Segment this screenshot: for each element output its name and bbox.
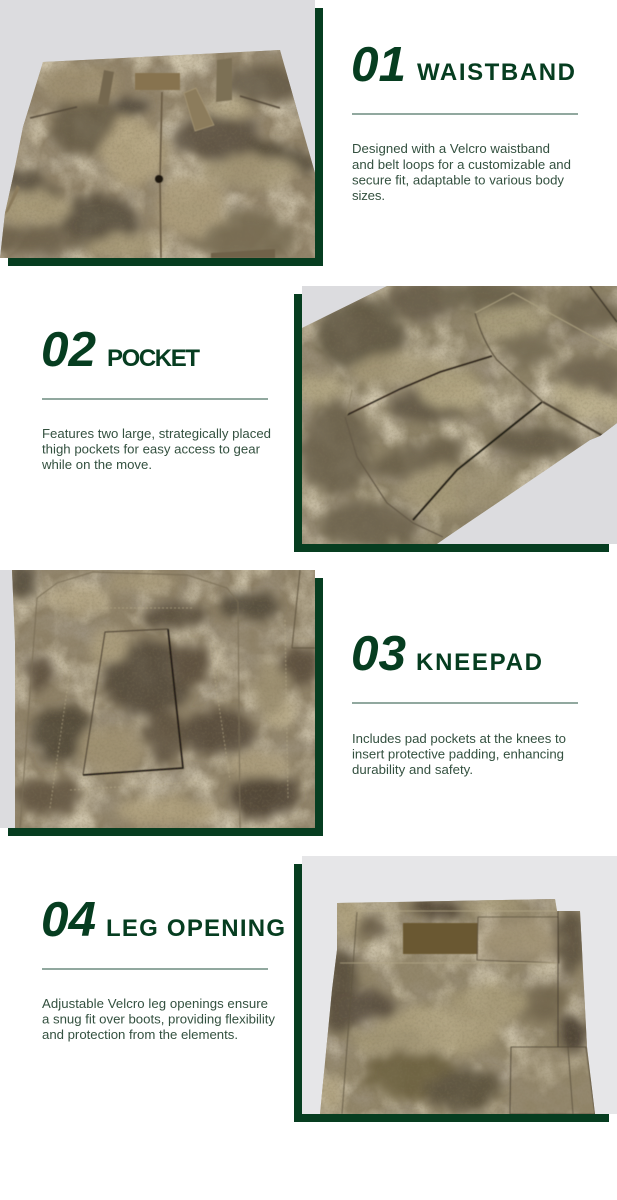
description: waistband: sizes. xyxy=(352,188,385,203)
description: kneepad: Includes pad pockets at the knees to xyxy=(352,731,566,746)
leg opening details xyxy=(340,911,595,1114)
description: kneepad xyxy=(352,731,566,777)
description: leg opening xyxy=(42,996,275,1042)
description: leg opening: and protection from the elements. xyxy=(42,1027,238,1042)
knee pad seams and opening xyxy=(20,570,315,828)
green corner frame xyxy=(294,864,609,1122)
description: waistband: secure fit, adaptable to various body xyxy=(352,172,564,188)
number 01: 01 xyxy=(351,37,406,92)
panel: leg opening xyxy=(41,856,617,1122)
panel: waistband xyxy=(0,0,578,266)
pocket seams and slits xyxy=(345,286,617,537)
heading: kneepad: KNEEPAD xyxy=(416,649,542,676)
description: leg opening: a snug fit over boots, providing flexibility xyxy=(42,1012,275,1026)
green corner frame xyxy=(8,8,323,266)
waistband details xyxy=(5,58,280,258)
panel: pocket xyxy=(41,278,617,552)
photo: waistband of camouflage trousers xyxy=(0,0,322,259)
description: waistband xyxy=(352,141,571,203)
number 04: 04 xyxy=(41,892,96,947)
photo: knee pad pocket of camouflage trousers xyxy=(0,564,318,828)
green corner frame xyxy=(294,294,609,552)
description: pocket xyxy=(41,426,271,472)
heading: waistband: WAISTBAND xyxy=(417,59,575,86)
description: pocket: Features two large, strategically placed xyxy=(42,426,271,441)
heading: pocket: POCKET xyxy=(107,345,200,372)
panel: kneepad xyxy=(0,564,578,836)
number 03: 03 xyxy=(351,626,406,681)
description: pocket: while on the move. xyxy=(41,457,152,472)
description: pocket: thigh pockets for easy access to gear xyxy=(42,442,261,456)
description: kneepad: durability and safety. xyxy=(352,762,473,777)
photo: thigh pocket of camouflage trousers xyxy=(292,278,617,547)
photo: leg opening of camouflage trousers xyxy=(302,856,617,1114)
description: waistband: Designed with a Velcro waistband xyxy=(352,141,550,156)
number 02: 02 xyxy=(41,322,97,377)
description: waistband: and belt loops for a customizable and xyxy=(352,157,571,172)
green corner frame xyxy=(8,578,323,836)
description: kneepad: insert protective padding, enhancing xyxy=(352,746,564,762)
heading: leg opening: LEG OPENING xyxy=(106,915,285,942)
description: leg opening: Adjustable Velcro leg openings ensure xyxy=(42,996,268,1011)
